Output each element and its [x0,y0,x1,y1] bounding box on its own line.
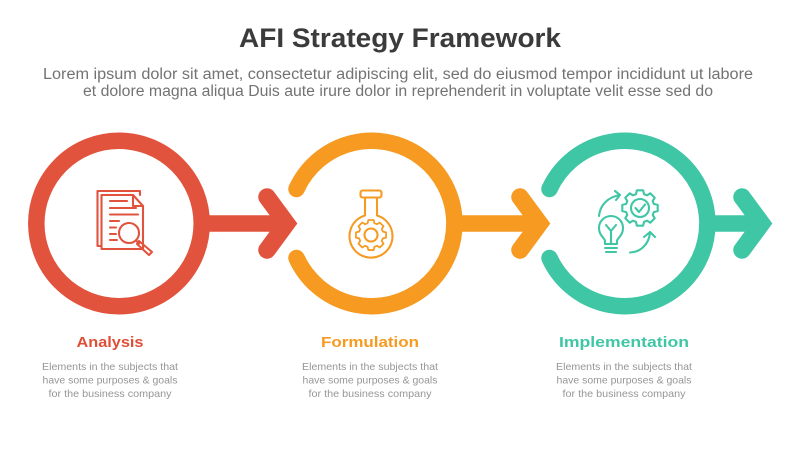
ring: implementation [550,141,707,306]
icon: flask with gear [350,190,392,258]
description: formulation [302,361,438,400]
ring: formulation [296,141,454,306]
subtitle text block: Lorem ipsum dolor sit amet, consectetur adipiscing elit, sed do eiusmod tempor incididunt ut labore [43,66,753,83]
label: analysis: Analysis [76,334,144,351]
label: implementation: Implementation [559,334,689,351]
icon: document with magnifier [98,191,152,255]
description: analysis: for the business company [48,388,172,400]
description: analysis: Elements in the subjects that [42,361,178,373]
arrow: formulation to implementation [458,197,540,250]
label: formulation: Formulation [321,334,419,351]
description: formulation: have some purposes & goals [302,374,438,386]
icon: bulb, gear and cycle arrows [599,190,658,252]
description: implementation: have some purposes & goals [556,374,692,386]
arrow: analysis to formulation [205,197,286,250]
panel: analysis step [36,141,286,400]
description: implementation: Elements in the subjects that [556,361,692,373]
ring: analysis [36,141,202,306]
description: formulation: Elements in the subjects that [302,361,438,373]
description: formulation: for the business company [308,388,432,400]
description: implementation [556,361,692,400]
description: analysis: have some purposes & goals [42,374,178,386]
arrow: implementation outgoing [710,197,762,250]
panel: formulation step [296,141,540,400]
subtitle text block [43,66,753,100]
description: implementation: for the business company [562,388,686,400]
title: AFI Strategy Framework [239,23,562,53]
subtitle text block: et dolore magna aliqua Duis aute irure dolor in reprehenderit in voluptate velit esse sed do [83,83,713,100]
description: analysis [42,361,178,400]
panel: implementation step [550,141,762,400]
